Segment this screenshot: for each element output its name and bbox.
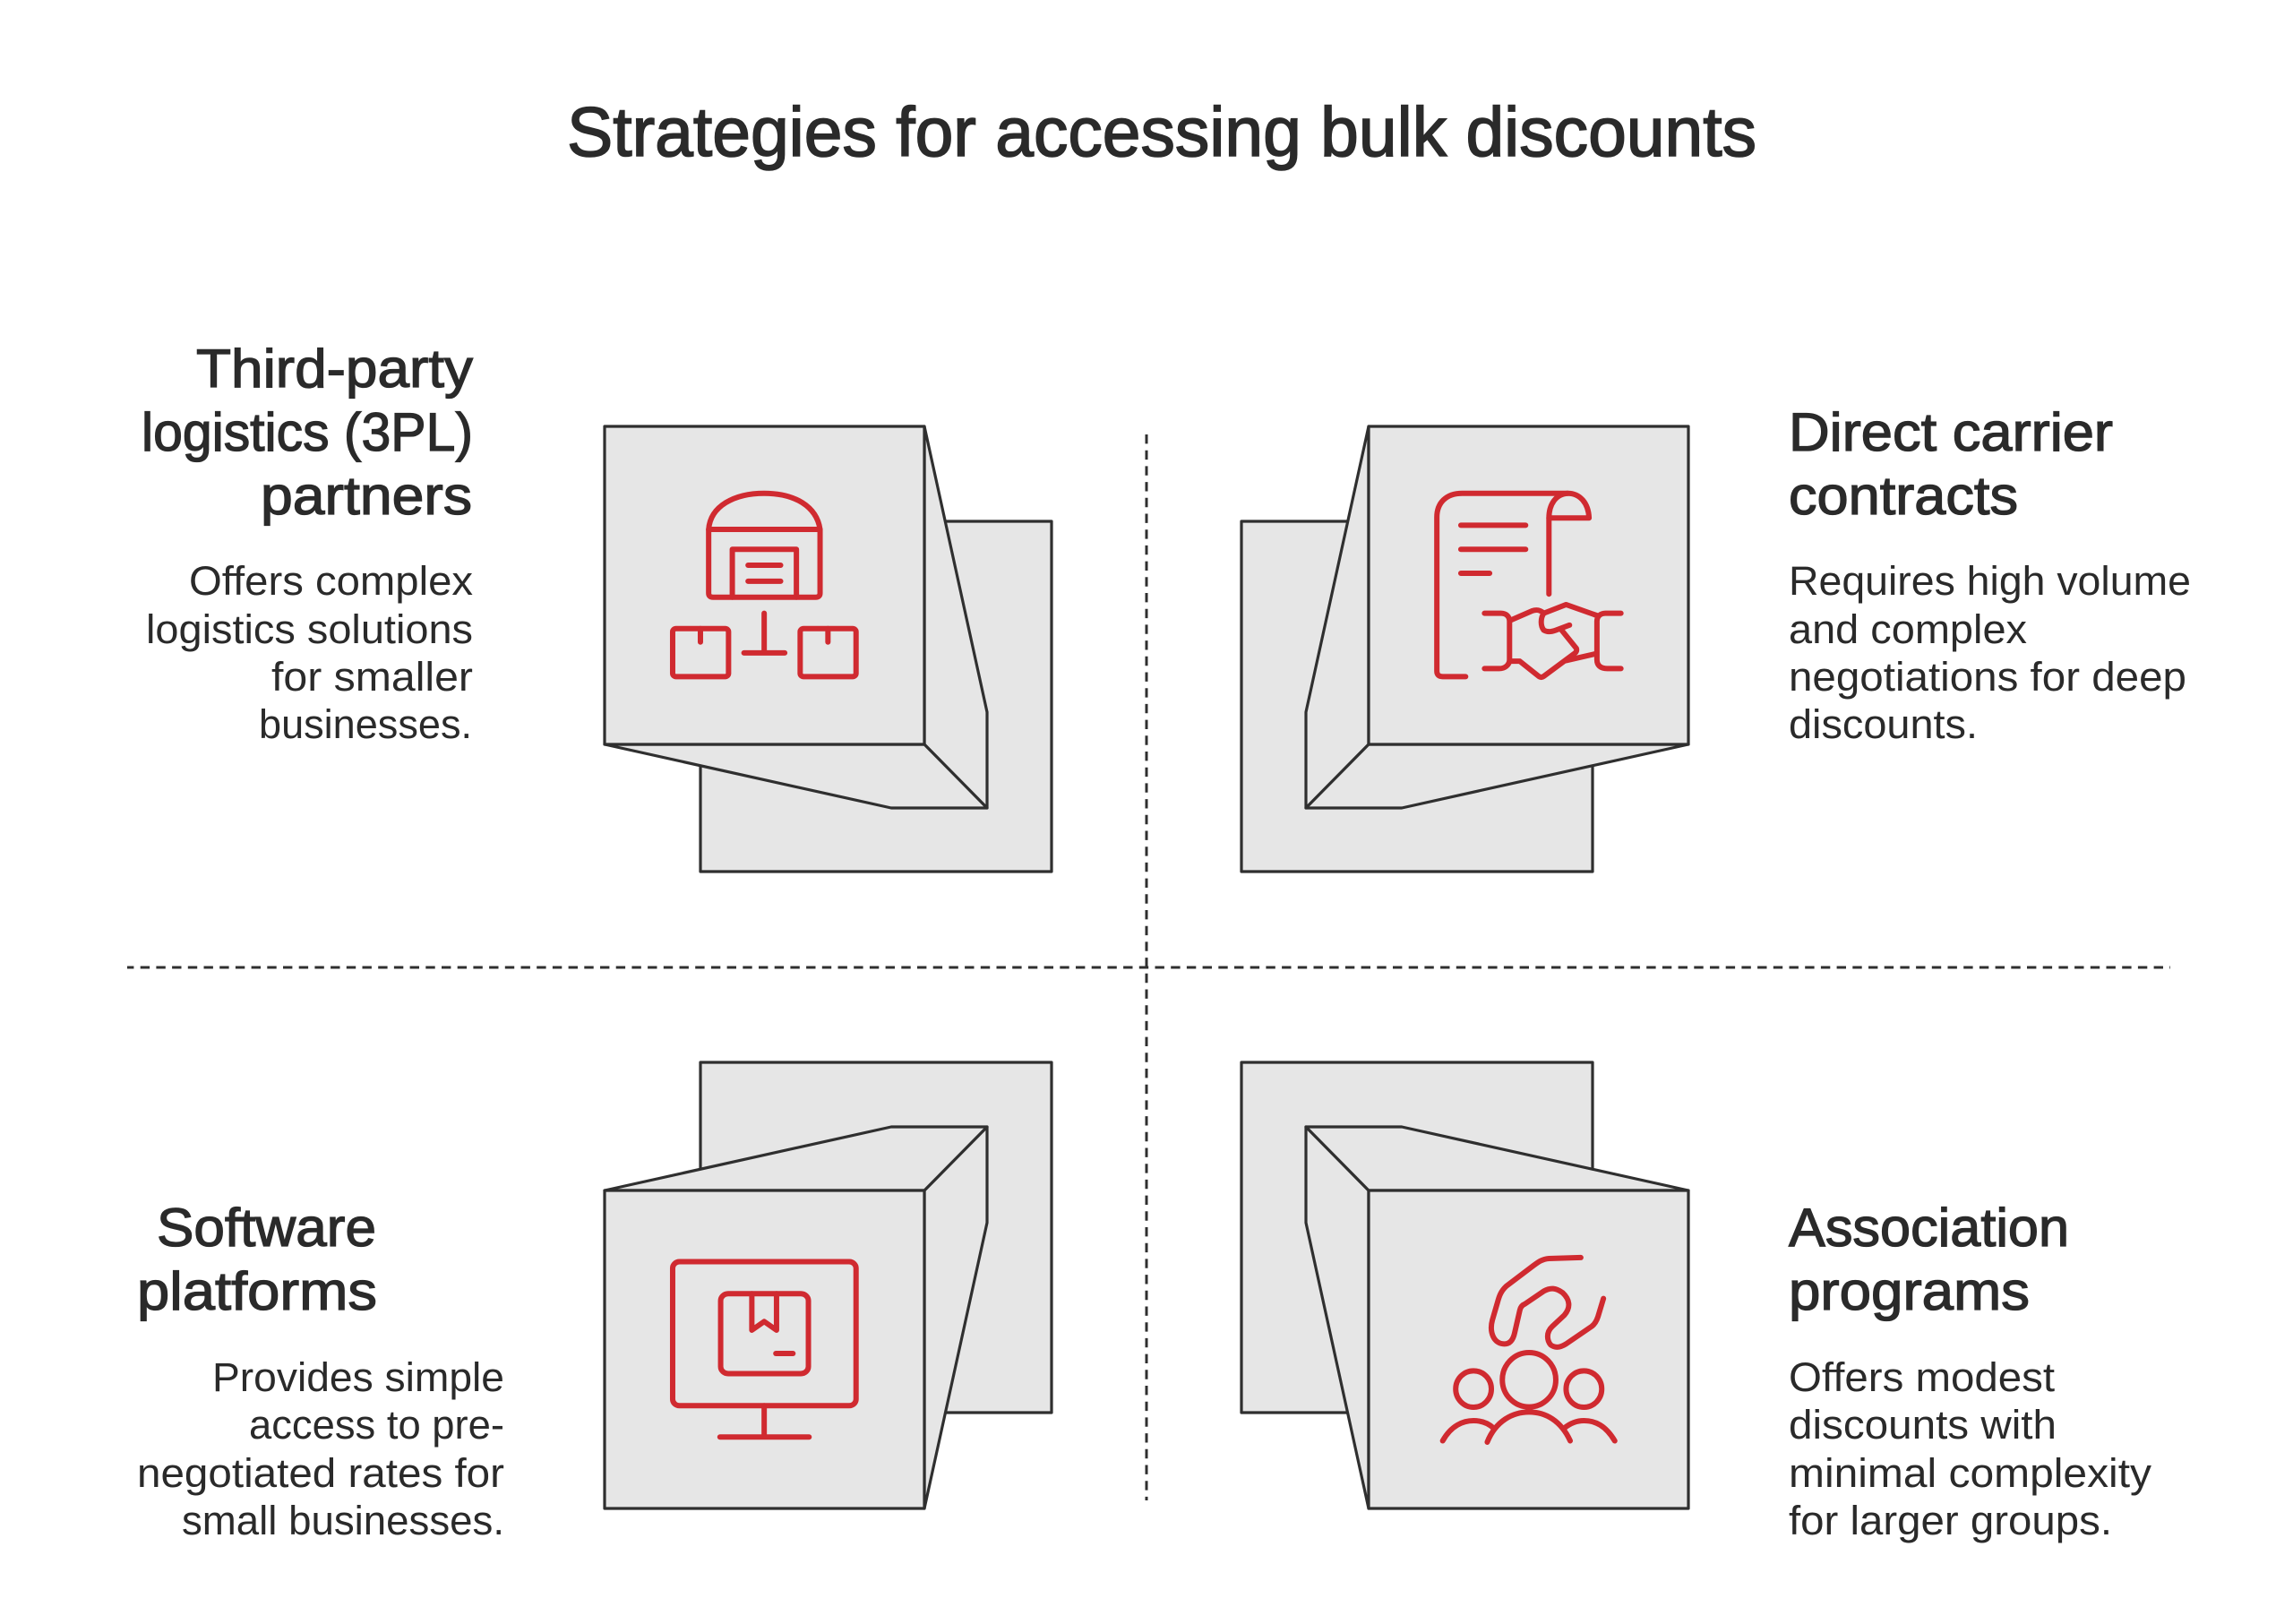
heading: direct carrier contracts	[1789, 402, 2113, 526]
heading: direct carrier contracts: contracts	[1789, 466, 2018, 526]
heading: third-party logistics: logistics (3PL)	[142, 402, 473, 462]
description: third-party logistics: for smaller	[271, 654, 473, 700]
title: Strategies for accessing bulk discounts	[567, 92, 1756, 171]
panel: software platforms graphic	[605, 1062, 1052, 1508]
text block: association programs	[1789, 1198, 2152, 1543]
description: third-party logistics: logistics solutions	[146, 606, 473, 652]
description: direct carrier contracts	[1789, 558, 2191, 747]
text block: third-party logistics	[142, 339, 474, 747]
description: association programs: for larger groups.	[1789, 1498, 2112, 1543]
horizontal dashed divider	[127, 966, 2170, 969]
description: third-party logistics	[146, 558, 474, 747]
description: association programs	[1789, 1354, 2152, 1543]
icon: warehouse and packages	[673, 494, 856, 676]
icon: monitor with package	[673, 1262, 856, 1437]
heading: association programs: Association	[1789, 1198, 2069, 1258]
icon: contract and handshake	[1437, 494, 1621, 677]
heading: third-party logistics: Third-party	[196, 339, 473, 399]
description: third-party logistics: Offers complex	[189, 558, 474, 604]
icon: hand over group of people	[1443, 1258, 1615, 1442]
description: direct carrier contracts: discounts.	[1789, 701, 1978, 747]
heading: software platforms: Software	[157, 1198, 376, 1258]
heading: association programs	[1789, 1198, 2069, 1321]
text block: direct carrier contracts	[1789, 402, 2191, 747]
heading: third-party logistics: partners	[261, 466, 472, 526]
description: association programs: discounts with	[1789, 1402, 2057, 1448]
description: association programs: Offers modest	[1789, 1354, 2056, 1400]
description: third-party logistics: businesses.	[259, 701, 472, 747]
description: direct carrier contracts: Requires high volume	[1789, 558, 2191, 604]
description: software platforms: Provides simple	[212, 1354, 504, 1400]
heading: association programs: programs	[1789, 1261, 2030, 1321]
description: direct carrier contracts: negotiations for deep	[1789, 654, 2186, 700]
panel: third-party logistics graphic	[605, 426, 1052, 872]
description: software platforms: negotiated rates for	[137, 1450, 504, 1496]
description: direct carrier contracts: and complex	[1789, 606, 2028, 652]
heading: software platforms: platforms	[137, 1261, 377, 1321]
vertical dashed divider	[1145, 434, 1148, 1500]
heading: direct carrier contracts: Direct carrier	[1789, 402, 2113, 462]
panel: direct carrier contracts graphic	[1241, 426, 1688, 872]
panel: association programs graphic	[1241, 1062, 1688, 1508]
heading: software platforms	[137, 1198, 377, 1321]
description: software platforms	[137, 1354, 504, 1543]
heading: third-party logistics	[142, 339, 473, 526]
description: software platforms: access to pre-	[249, 1402, 504, 1448]
description: association programs: minimal complexity	[1789, 1450, 2152, 1496]
text block: software platforms	[137, 1198, 504, 1543]
description: software platforms: small businesses.	[182, 1498, 504, 1543]
